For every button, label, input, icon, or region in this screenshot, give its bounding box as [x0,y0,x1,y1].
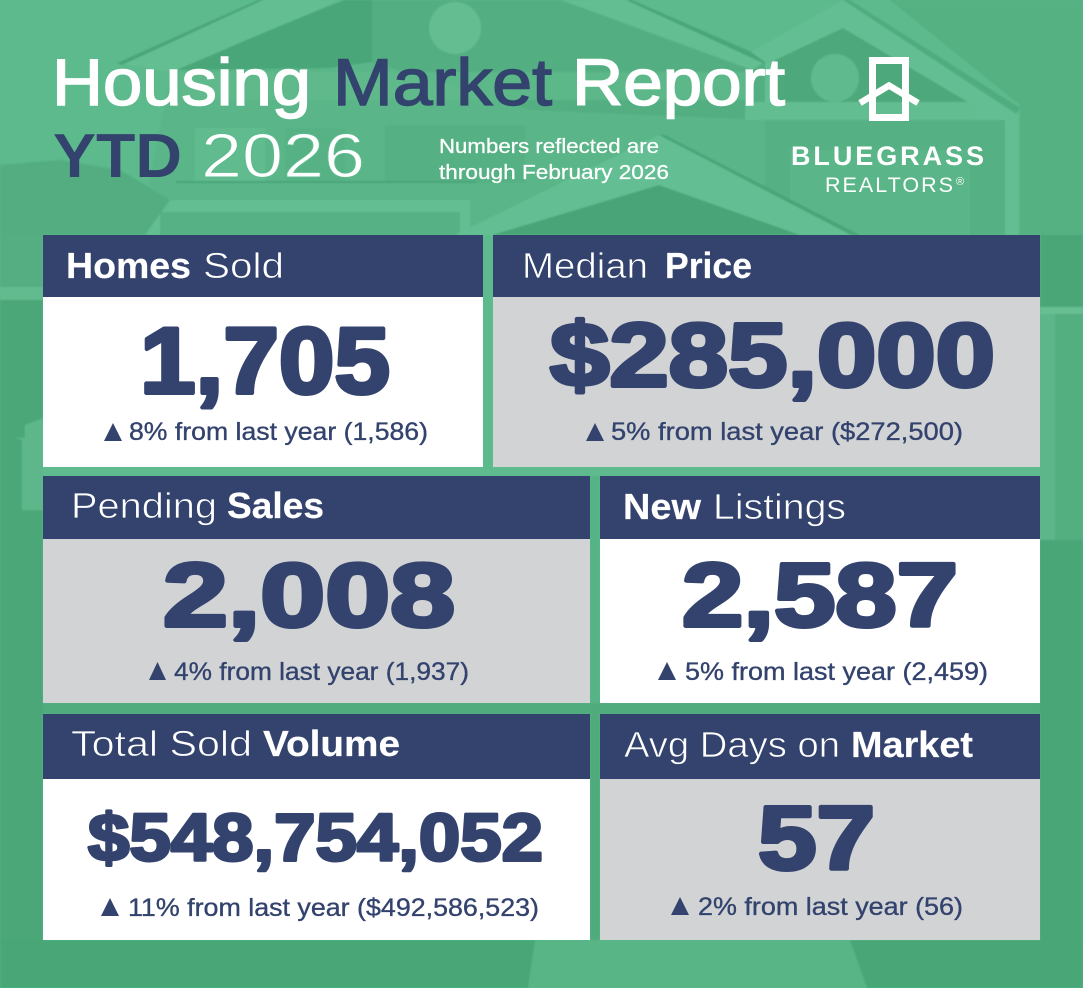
logo: Bluegrass Realtors: ® [956,176,964,188]
panel: pending sales: Pending [71,485,217,526]
subtitle: YTD 2026 [53,122,365,191]
panel: new listings: 5% from last year (2,459) [685,658,988,686]
panel: homes sold: Homes [66,245,191,286]
panel: average days on market: 2% from last year (56) [698,893,963,921]
subtitle: YTD 2026: YTD [53,122,182,191]
lower gable [455,135,851,235]
panel: pending sales: Sales [227,485,324,526]
panel: average days on market: Market [851,724,973,765]
panel: total sold volume: Volume [263,723,400,764]
panel: median price: Median [522,245,648,286]
panel: pending sales: 2,008 [163,546,455,646]
panel: homes sold: 8% from last year (1,586) [129,418,428,446]
panel: new listings: New [623,486,702,527]
note: data period: through February 2026 [439,162,669,184]
panel: median price: $285,000 [550,306,995,406]
panel: median price: 5% from last year ($272,500) [611,418,963,446]
title: Market [333,45,552,119]
left strip [0,235,43,287]
panel: new listings: Listings [713,486,846,527]
title: Housing [52,45,311,119]
panel: new listings [600,476,1040,703]
icon: house outline [860,60,918,118]
note: data period: Numbers reflected are [439,136,659,158]
panel: total sold volume: $548,754,052 [88,800,543,876]
subtitle: YTD 2026: 2026 [201,122,365,191]
logo: Bluegrass Realtors [791,60,984,197]
right strip [1040,235,1083,307]
panel: total sold volume [43,714,590,940]
panel: average days on market: Avg Days on [624,724,840,765]
trees [0,160,170,235]
panel: total sold volume: Total Sold [71,723,252,764]
panel: pending sales [43,476,590,703]
panel: homes sold [43,235,483,467]
logo: Bluegrass Realtors: BLUEGRASS [791,141,984,171]
lawn and path [0,940,1083,988]
right gable [751,0,1018,235]
panel: average days on market [600,714,1040,940]
note: data period [439,136,669,184]
panel: pending sales: 4% from last year (1,937) [174,658,469,686]
panel: new listings: 2,587 [682,546,958,646]
panel: homes sold: 1,705 [140,308,390,413]
windows and trim [195,128,265,183]
title: Report [572,45,785,119]
panel: total sold volume: 11% from last year ($492,586,523) [128,894,539,922]
panel: median price: Price [665,245,752,286]
panel gaps [483,235,493,476]
panel: homes sold: Sold [203,245,284,286]
main gable wall [145,0,765,235]
title [52,45,785,119]
panel: average days on market: 57 [758,789,875,889]
panel: median price [493,235,1040,467]
logo: Bluegrass Realtors: REALTORS [825,173,953,197]
